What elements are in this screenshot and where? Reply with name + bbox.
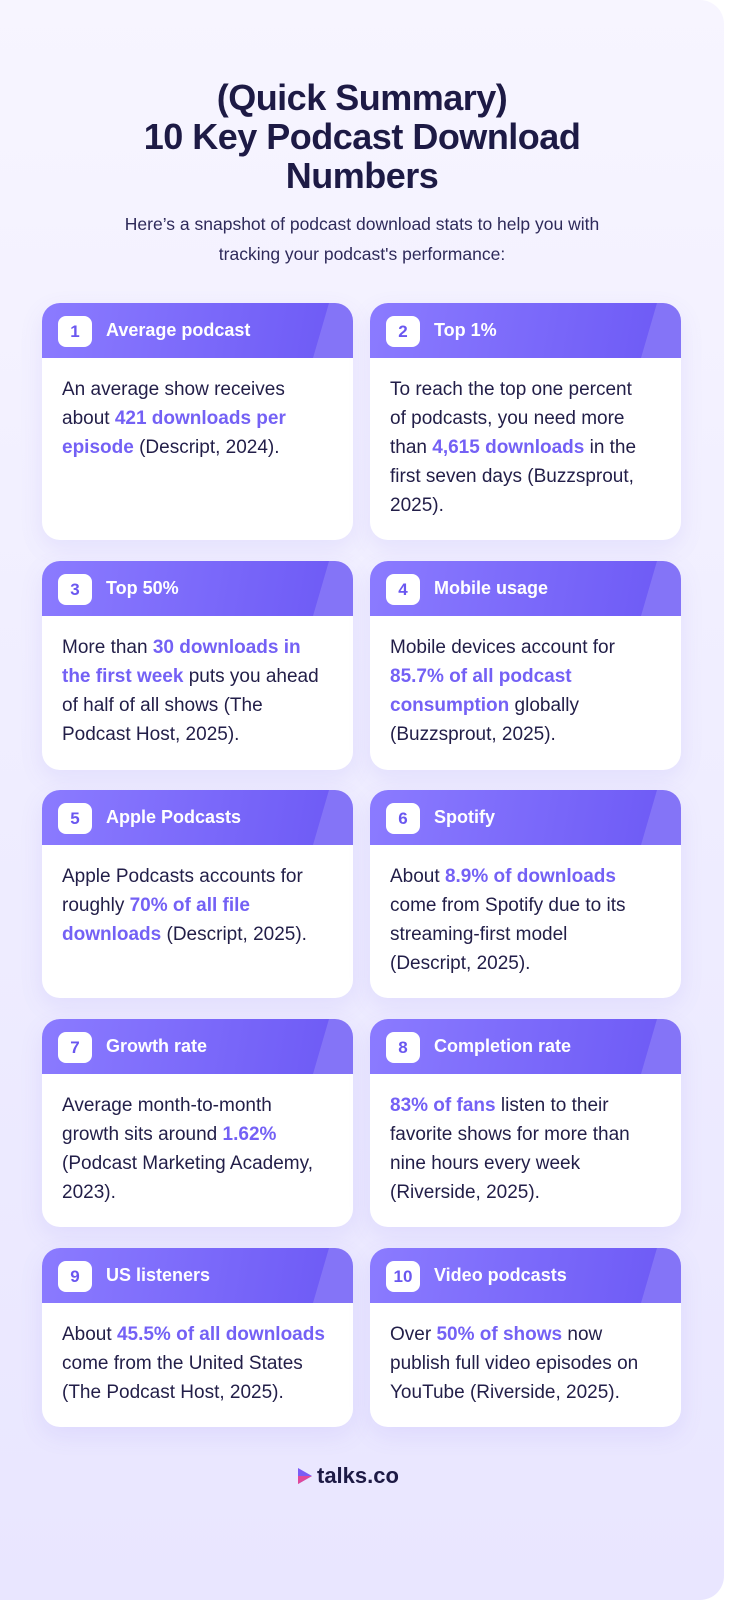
card 6: About 8.9% of downloads: [390, 866, 616, 887]
card 1: An average show receives: [62, 379, 285, 400]
card 3: Top 50%: [106, 578, 179, 598]
card 7: (Podcast Marketing Academy,: [62, 1153, 313, 1174]
card 2: Top 1%: [434, 320, 497, 340]
card 8: nine hours every week: [390, 1153, 580, 1174]
subtitle: [125, 214, 599, 264]
card 2: first seven days (Buzzsprout,: [390, 466, 634, 487]
card 4: 4: [398, 580, 408, 599]
title: 10 Key Podcast Download: [144, 116, 580, 157]
card 8: favorite shows for more than: [390, 1124, 630, 1145]
card 8: 8: [398, 1038, 408, 1057]
card 6: come from Spotify due to its: [390, 895, 626, 916]
card 1: about 421 downloads per: [62, 408, 286, 429]
title: [144, 77, 580, 196]
card 2: of podcasts, you need more: [390, 408, 624, 429]
icon: logo mark: [298, 1468, 312, 1484]
card 5: Apple Podcasts: [106, 807, 241, 827]
card 5: roughly 70% of all file: [62, 895, 250, 916]
card 1: Average podcast: [106, 320, 250, 340]
card 10: [370, 1248, 681, 1427]
title: (Quick Summary): [217, 77, 507, 118]
card 3: of half of all shows (The: [62, 695, 263, 716]
card 8: 83% of fans listen to their: [390, 1095, 609, 1116]
card 8: Completion rate: [434, 1036, 571, 1056]
card 10: Video podcasts: [434, 1265, 567, 1285]
card 3: [42, 561, 353, 770]
card 7: 2023).: [62, 1182, 116, 1203]
card 9: US listeners: [106, 1265, 210, 1285]
card 7: Growth rate: [106, 1036, 207, 1056]
card 10: publish full video episodes on: [390, 1353, 638, 1374]
card 10: Over 50% of shows now: [390, 1324, 602, 1345]
card 4: 85.7% of all podcast: [390, 666, 572, 687]
card 9: About 45.5% of all downloads: [62, 1324, 325, 1345]
card 10: YouTube (Riverside, 2025).: [390, 1382, 620, 1403]
card 9: (The Podcast Host, 2025).: [62, 1382, 284, 1403]
card 7: Average month-to-month: [62, 1095, 272, 1116]
card 4: Mobile usage: [434, 578, 548, 598]
card 9: [42, 1248, 353, 1427]
card 1: episode (Descript, 2024).: [62, 437, 280, 458]
card 7: growth sits around 1.62%: [62, 1124, 276, 1145]
card 6: (Descript, 2025).: [390, 953, 530, 974]
card 2: [370, 303, 681, 540]
card 5: 5: [70, 809, 80, 828]
card 6: Spotify: [434, 807, 495, 827]
card 2: 2: [398, 322, 408, 341]
subtitle: Here’s a snapshot of podcast download stats to help you with: [125, 214, 599, 234]
card 3: 3: [70, 580, 80, 599]
card 3: More than 30 downloads in: [62, 637, 301, 658]
card 5: Apple Podcasts accounts for: [62, 866, 303, 887]
card 4: Mobile devices account for: [390, 637, 615, 658]
card 5: [42, 790, 353, 998]
card 1: [42, 303, 353, 540]
card 8: (Riverside, 2025).: [390, 1182, 540, 1203]
card 2: than 4,615 downloads in the: [390, 437, 636, 458]
card 6: [370, 790, 681, 998]
card 4: consumption globally: [390, 695, 579, 716]
card 3: the first week puts you ahead: [62, 666, 319, 687]
card 2: 2025).: [390, 495, 444, 516]
card 9: 9: [70, 1267, 80, 1286]
card 9: come from the United States: [62, 1353, 303, 1374]
card 4: [370, 561, 681, 770]
card 7: [42, 1019, 353, 1227]
card 4: (Buzzsprout, 2025).: [390, 724, 556, 745]
card 6: streaming-first model: [390, 924, 567, 945]
card 2: To reach the top one percent: [390, 379, 632, 400]
card 3: Podcast Host, 2025).: [62, 724, 239, 745]
card 8: [370, 1019, 681, 1227]
card 7: 7: [70, 1038, 80, 1057]
card 10: 10: [394, 1267, 412, 1286]
card 6: 6: [398, 809, 408, 828]
title: Numbers: [286, 155, 438, 196]
card 5: downloads (Descript, 2025).: [62, 924, 307, 945]
card 1: 1: [70, 322, 80, 341]
subtitle: tracking your podcast's performance:: [219, 244, 505, 264]
logo: talks.co: [317, 1463, 399, 1488]
